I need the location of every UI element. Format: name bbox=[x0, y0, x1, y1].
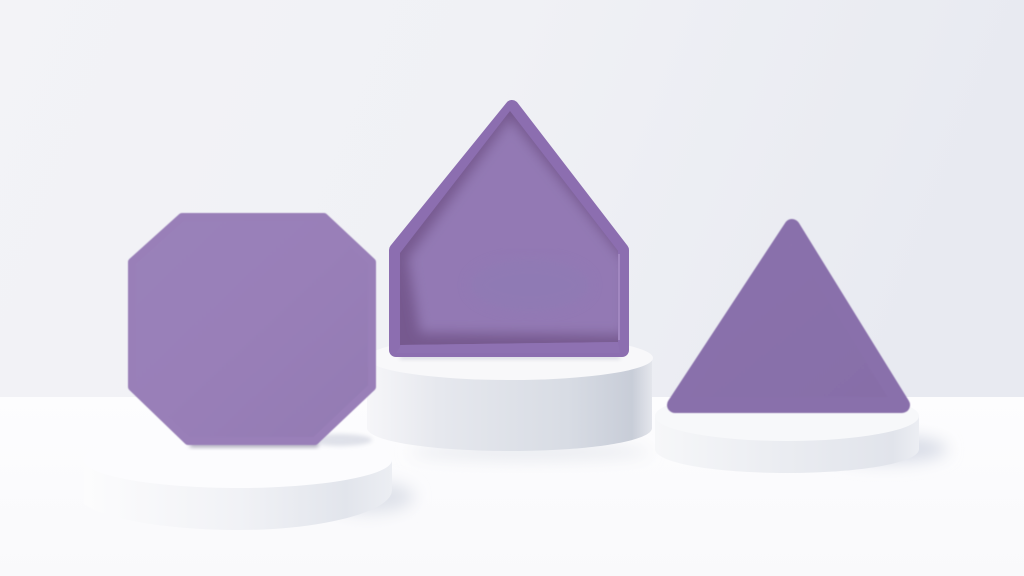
podium: center bbox=[367, 336, 653, 451]
floor shadow: right podium bbox=[823, 435, 947, 463]
contact shadow: house bbox=[400, 355, 620, 359]
contact shadow: octagon bbox=[190, 443, 318, 447]
shape: triangle bbox=[675, 227, 902, 405]
podium: left bbox=[84, 432, 392, 530]
floor bbox=[0, 397, 1024, 576]
house bottom ledge bbox=[396, 342, 620, 353]
floor shadow: center podium bbox=[410, 444, 650, 460]
background wall bbox=[0, 0, 1024, 398]
house rim bbox=[396, 107, 622, 350]
house inner panel bbox=[400, 111, 618, 345]
shadow on left podium top bbox=[308, 434, 372, 446]
floor shadow: left podium bbox=[322, 481, 414, 513]
podium: right bbox=[655, 391, 919, 473]
shape: octagon bbox=[132, 217, 372, 441]
shape: house tray bbox=[396, 107, 626, 353]
house inner fill with soft shading bbox=[408, 118, 626, 335]
house inner center tint bbox=[470, 259, 590, 311]
house right highlight bbox=[618, 254, 620, 340]
